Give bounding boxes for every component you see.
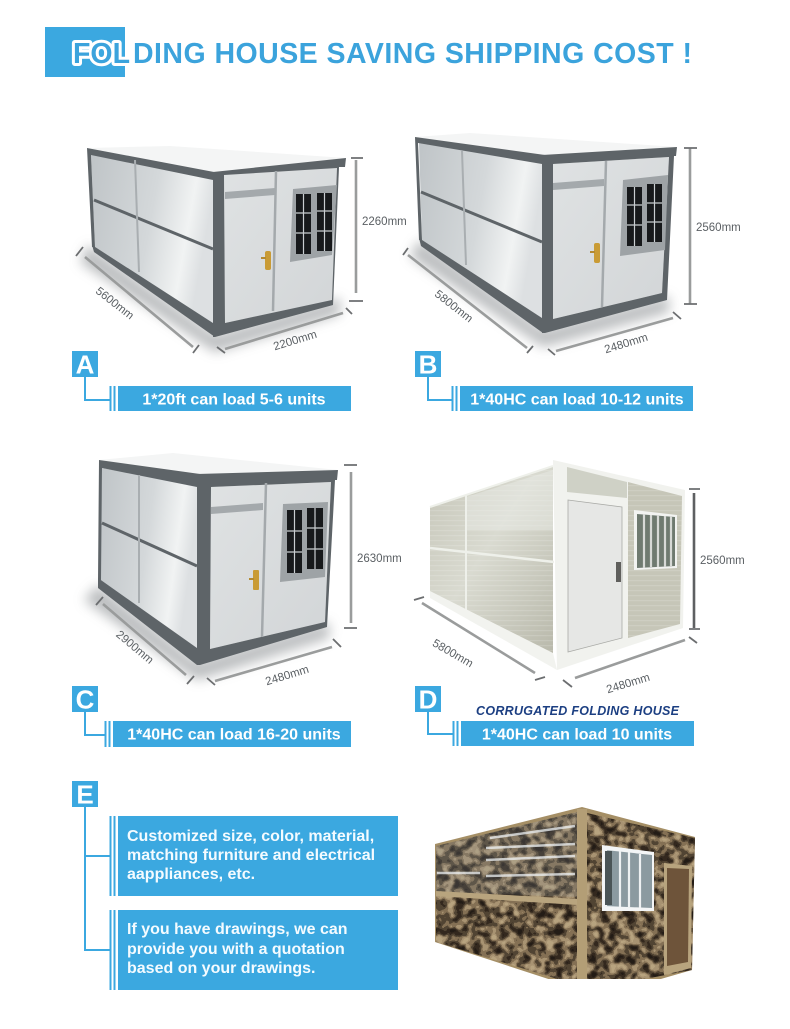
badge D: D <box>419 684 437 714</box>
front frame <box>213 158 346 337</box>
roof <box>99 453 338 475</box>
connector B <box>428 377 456 411</box>
left top beam <box>98 460 200 580</box>
right camouflage wall <box>587 813 695 979</box>
wall gloss <box>436 812 577 897</box>
label 5600mm: 5600mm <box>93 285 136 322</box>
front wall <box>224 167 339 323</box>
house E camouflage photo <box>435 807 695 979</box>
corner post <box>577 809 587 990</box>
dimension: width <box>563 637 697 687</box>
caption C <box>72 684 351 747</box>
left bottom beam <box>98 578 197 665</box>
bar D: 1*40HC can load 10 units <box>482 726 672 744</box>
section E notes <box>72 780 398 990</box>
ground shadow <box>84 585 329 680</box>
badge E: E <box>76 780 94 810</box>
panel: drawings: provide you with a quotation <box>127 941 345 958</box>
front wall <box>210 482 331 649</box>
label 5800mm: 5800mm <box>432 288 475 325</box>
bar B <box>460 386 693 411</box>
left bottom beam <box>92 245 215 337</box>
front frame <box>542 147 677 333</box>
dimension: width <box>217 308 352 353</box>
dimension: height <box>684 148 697 304</box>
right corrugated wall <box>553 460 685 670</box>
left divider <box>102 523 197 566</box>
badge A: A <box>76 350 95 380</box>
outlined title start: FOL <box>73 38 130 70</box>
caption A <box>72 350 351 411</box>
door handle <box>249 570 259 590</box>
house D illustration <box>414 460 745 696</box>
ground shadow <box>80 245 340 352</box>
panel: customization: Customized size, color, material, <box>127 828 374 845</box>
panel: customization <box>118 816 398 896</box>
label 2260mm: 2260mm <box>362 216 407 228</box>
door header and divider <box>211 503 263 514</box>
dimension: length <box>403 248 533 353</box>
connector A <box>85 377 114 411</box>
connector C <box>85 712 110 747</box>
caption B <box>415 350 693 411</box>
left divider <box>421 192 542 242</box>
dimension: height <box>349 158 363 301</box>
bar C <box>113 721 351 747</box>
window <box>620 175 668 256</box>
panel: customization: aappliances, etc. <box>127 866 255 883</box>
house C illustration <box>84 453 402 688</box>
horizontal beam <box>436 891 578 905</box>
left bottom beam <box>419 238 543 333</box>
left top beam <box>415 137 545 240</box>
dimension: length <box>76 247 199 353</box>
bar A <box>118 386 351 411</box>
left wall <box>100 468 197 648</box>
transom <box>567 467 627 498</box>
doorway <box>664 863 692 975</box>
title text: DING HOUSE SAVING SHIPPING COST ! <box>133 38 692 70</box>
label 2900mm: 2900mm <box>113 629 155 667</box>
label 2480mm: 2480mm <box>603 332 649 356</box>
house B illustration <box>403 133 741 356</box>
panel: drawings <box>118 910 398 990</box>
house A illustration <box>76 146 407 353</box>
window with bars <box>634 510 677 570</box>
label 2560mm: 2560mm <box>696 222 741 234</box>
left camouflage wall <box>436 812 577 979</box>
door handle <box>590 243 600 263</box>
bar D <box>461 721 694 746</box>
connector E <box>85 807 114 990</box>
caption D <box>415 684 694 746</box>
badge B: B <box>419 350 437 380</box>
door header and divider <box>553 179 604 190</box>
badge C: C <box>76 684 95 714</box>
label 2200mm: 2200mm <box>272 329 318 353</box>
bar C: 1*40HC can load 16-20 units <box>127 726 341 744</box>
front wall <box>553 157 669 319</box>
ground shadow <box>410 240 669 347</box>
dimension: width <box>207 639 341 685</box>
window <box>602 845 654 911</box>
label 2480mm: 2480mm <box>605 672 651 696</box>
dimension: length <box>96 597 194 684</box>
connector D <box>428 712 458 746</box>
subtitle corrugated: CORRUGATED FOLDING HOUSE <box>476 704 680 718</box>
left corrugated wall <box>430 466 557 670</box>
door handle <box>261 251 271 270</box>
label 2480mm: 2480mm <box>264 664 310 688</box>
window <box>280 502 328 582</box>
label 5800mm: 5800mm <box>430 637 475 670</box>
left wall <box>419 143 542 318</box>
roof <box>88 146 346 173</box>
left wall <box>91 154 213 323</box>
door <box>568 500 622 652</box>
title accent box <box>45 27 125 77</box>
left divider <box>94 200 213 249</box>
label 2560mm: 2560mm <box>700 555 745 567</box>
dimension: length <box>414 597 545 680</box>
window <box>290 185 337 262</box>
panel: drawings: based on your drawings. <box>127 960 315 977</box>
frame body <box>435 807 695 990</box>
bar B: 1*40HC can load 10-12 units <box>470 392 684 408</box>
dimension: height <box>344 465 357 628</box>
panel: customization: matching furniture and electrical <box>127 847 375 864</box>
panel: drawings: If you have drawings, we can <box>127 921 348 938</box>
front frame <box>197 470 338 665</box>
left top beam <box>87 148 214 247</box>
door handle <box>616 562 621 582</box>
outlined title start: FOL <box>73 38 130 70</box>
label 2630mm: 2630mm <box>357 553 402 565</box>
door header and divider <box>225 188 275 199</box>
dimension: width <box>548 312 681 355</box>
title <box>45 27 692 77</box>
bar A: 1*20ft can load 5-6 units <box>142 392 326 408</box>
dimension: height <box>689 489 700 629</box>
badge E <box>72 780 98 810</box>
roof <box>415 133 677 156</box>
